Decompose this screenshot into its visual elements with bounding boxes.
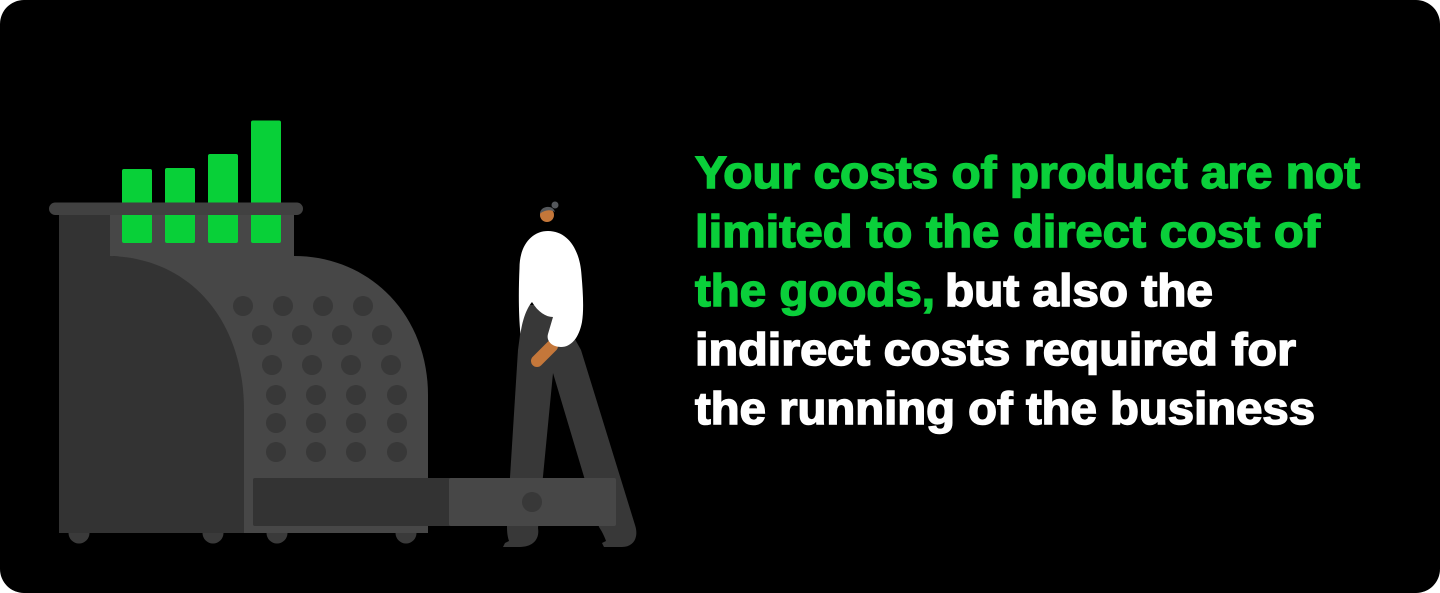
register light body: [110, 215, 428, 533]
register top shelf: [49, 202, 303, 215]
illustration: cash register: [49, 120, 428, 544]
register dark left body: [59, 212, 245, 533]
line 3 green part: the goods,: [695, 265, 935, 316]
person hair: [540, 207, 555, 214]
line 3 white part: but also the: [945, 265, 1213, 316]
headline statement: [695, 147, 1360, 434]
register cash drawer: [253, 478, 616, 526]
register wheels: [68, 522, 416, 544]
drawer front: [449, 478, 616, 526]
register keys: [233, 296, 407, 462]
drawer dark side: [253, 478, 453, 526]
green bars inside display window: [122, 212, 281, 243]
drawer knob: [522, 492, 542, 512]
person head: [540, 208, 554, 222]
line 4: indirect costs required for: [695, 324, 1296, 375]
line 5: the running of the business: [695, 383, 1315, 434]
person legs: [503, 305, 636, 547]
person forearm: [537, 346, 552, 361]
green bar chart: [122, 120, 281, 243]
person hair bun: [552, 202, 558, 208]
illustration: person standing: [503, 202, 636, 547]
person white shirt: [519, 231, 583, 347]
line 2: limited to the direct cost of: [695, 206, 1321, 257]
line 1: Your costs of product are not: [695, 147, 1360, 198]
